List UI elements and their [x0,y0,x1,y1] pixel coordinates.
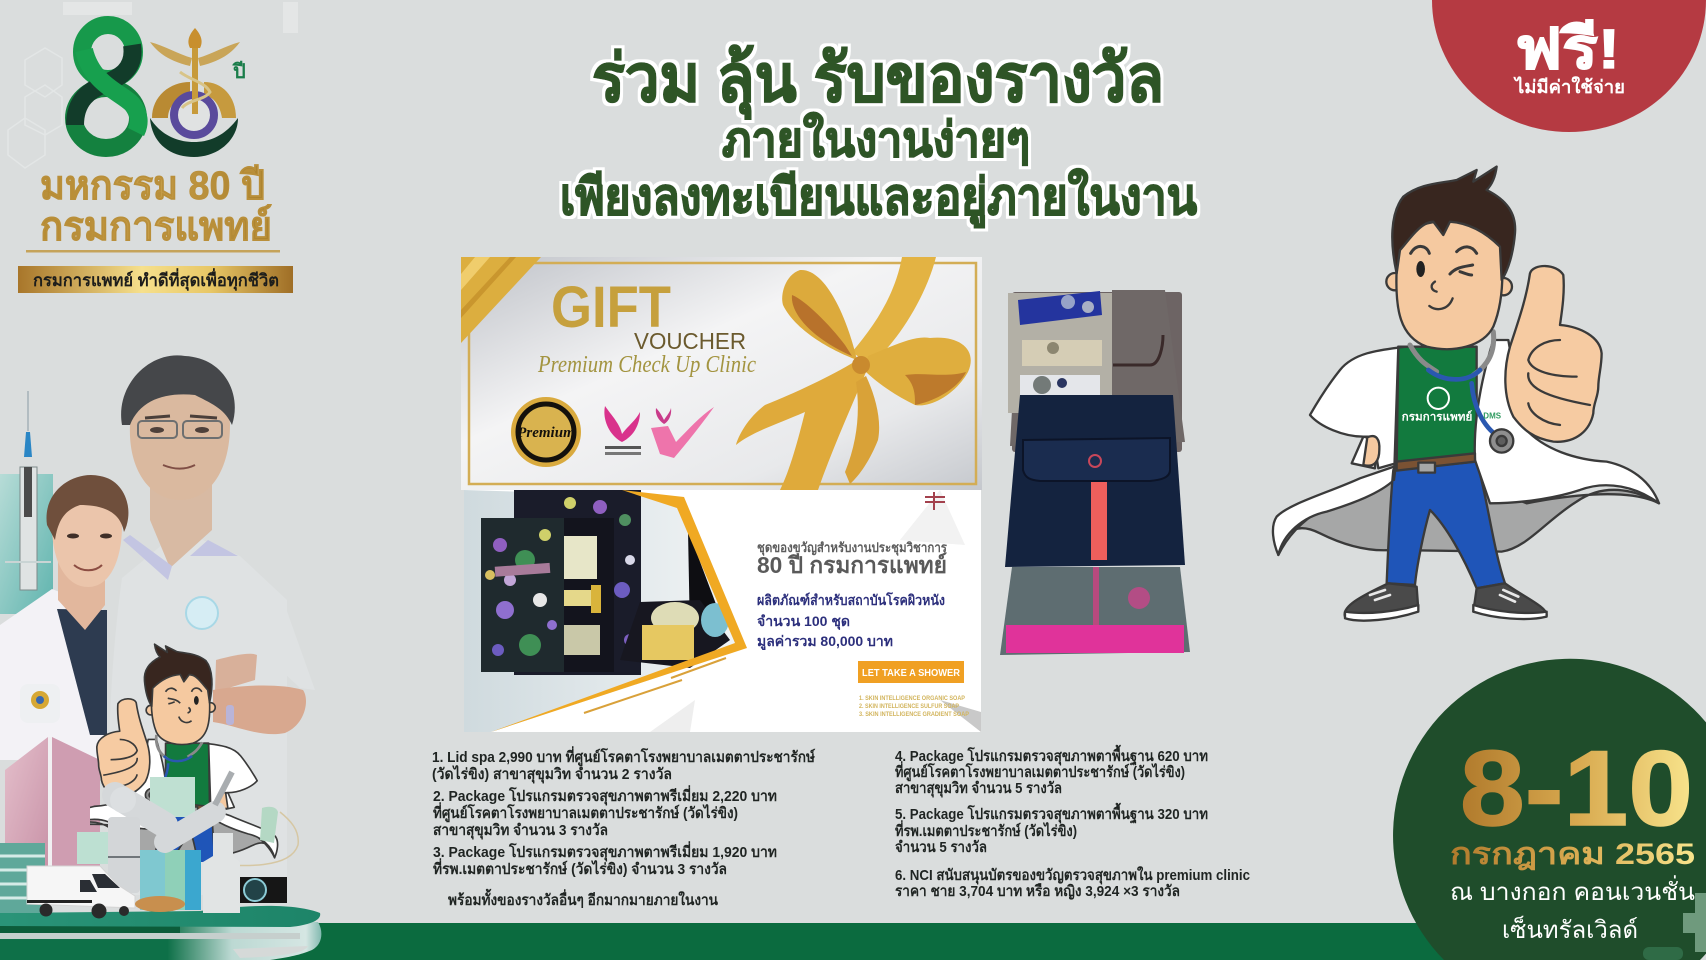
title: ภายในงานง่ายๆ [722,111,1030,167]
panel: tote bags [1000,290,1190,655]
product list: 3. SKIN INTELLIGENCE GRADIENT SOAP [859,712,969,718]
prize list left column: ที่ศูนย์โรคตาโรงพยาบาลเมตตาประชารักษ์ (วัดไร่ขิง) [433,802,738,823]
venue: ณ บางกอก คอนเวนชั่น [1450,875,1695,906]
prize list left column: สาขาสุขุมวิท จำนวน 3 รางวัล [433,821,608,840]
orange button [858,661,964,683]
event name line 1: มหกรรม 80 ปี [40,164,265,208]
bottle [203,833,240,913]
product photo [464,490,747,732]
gift set text: 80 ปี กรมการแพทย์ [757,552,947,578]
shirt dms text: DMS [1483,412,1502,421]
small mascot [90,643,278,862]
panel: date and venue [1393,659,1706,960]
coins [135,896,185,912]
prize list right column [895,744,1250,900]
voucher heading: GIFT [551,275,671,340]
panel: free badge [1432,0,1706,132]
prize list left column: ที่รพ.เมตตาประชารักษ์ (วัดไร่ขิง) จำนวน 3 รางวัล [433,858,727,878]
shirt logo [1428,388,1449,409]
panel: gift voucher: Premium Check Up Clinic [537,352,756,378]
prize list right column: จำนวน 5 รางวัล [895,839,987,856]
product list: 2. SKIN INTELLIGENCE SULFUR SOAP [859,704,959,710]
pink building [5,737,100,867]
logo years label: ปี [232,60,246,83]
free subtext: ไม่มีค่าใช้จ่าย [1513,76,1625,97]
month: กรกฎาคม 2565 [1450,838,1695,871]
mascot: doctor thumbs up [1273,167,1659,621]
prize list left column [432,746,815,909]
prize list left column: 1. Lid spa 2,990 บาท ที่ศูนย์โรคตาโรงพยาบาลเมตตาประชารักษ์ [432,746,815,767]
female doctor [0,475,128,760]
bottom green band [270,923,1500,960]
pink best service check [651,407,714,458]
orange button: LET TAKE A SHOWER [862,668,961,679]
prize list left column: พร้อมทั้งของรางวัลอื่นๆ อีกมากมายภายในงาน [448,888,719,909]
gold banner [18,250,293,293]
panel: skin institute gift set [464,490,981,732]
teal tower [0,474,53,614]
shirt text: กรมการแพทย์ [1402,410,1472,424]
title: เพียงลงทะเบียนและอยู่ภายในงาน [560,168,1197,228]
gold banner: กรมการแพทย์ ทำดีที่สุดเพื่อทุกชีวิต [33,268,279,291]
bubble icon [244,879,266,901]
prize list right column: 5. Package โปรแกรมตรวจสุขภาพตาพื้นฐาน 320 บาท [895,802,1208,824]
pink institute logo [604,406,641,455]
orange frame [491,490,747,732]
free heading: ฟรี! [1515,17,1620,80]
gift set text: ผลิตภัณฑ์สำหรับสถาบันโรคผิวหนัง [757,591,945,608]
medical boxes [0,777,201,913]
prize list left column: 2. Package โปรแกรมตรวจสุขภาพตาพรีเมี่ยม 2,220 บาท [433,785,777,806]
event name line 2: กรมการแพทย์ [40,204,272,249]
gift set text: มูลค่ารวม 80,000 บาท [757,633,893,650]
gift set text: จำนวน 100 ชุด [757,613,850,630]
illustration: doctors and medical scene [0,355,321,960]
male doctor [109,355,315,903]
premium seal: Premium [517,425,575,441]
prize list right column: 4. Package โปรแกรมตรวจสุขภาพตาพื้นฐาน 620 บาท [895,744,1208,766]
premium seal [511,397,581,467]
ministry logo [925,492,945,510]
prize list right column: ที่ศูนย์โรคตาโรงพยาบาลเมตตาประชารักษ์ (วัดไร่ขิง) [895,761,1185,782]
panel: date and venue: เซ็นทรัลเวิลด์ [1502,915,1638,944]
orange accent lines [584,658,726,713]
platform [0,906,321,960]
prize list left column: (วัดไร่ขิง) สาขาสุขุมวิท จำนวน 2 รางวัล [432,764,672,784]
date: 8-10 [1460,728,1693,848]
panel: gift voucher: VOUCHER [634,328,746,354]
syringe [5,391,51,590]
gift set text [757,540,947,650]
prize list right column: 6. NCI สนับสนุนบัตรของขวัญตรวจสุขภาพใน premium clinic [895,866,1250,885]
panel: gift voucher [461,257,982,490]
gold ribbon bow [736,257,971,490]
faint hexagon pattern [8,2,298,168]
product list [859,696,969,718]
gift set text: ชุดของขวัญสำหรับงานประชุมวิชาการ [757,540,947,556]
title: ร่วม ลุ้น รับของรางวัล [592,41,1164,120]
inhaler [260,807,278,843]
prize list left column: 3. Package โปรแกรมตรวจสุขภาพตาพรีเมี่ยม 1,920 บาท [433,841,777,862]
prize list right column: สาขาสุขุมวิท จำนวน 5 รางวัล [895,779,1062,798]
prize list right column: ราคา ชาย 3,704 บาท หรือ หญิง 3,924 ×3 รางวัล [895,882,1180,900]
robot arm [108,772,232,893]
prize list right column: ที่รพ.เมตตาประชารักษ์ (วัดไร่ขิง) [895,820,1077,840]
logo: 80 years [74,25,246,157]
product list: 1. SKIN INTELLIGENCE ORGANIC SOAP [859,696,965,702]
ambulance [27,866,135,918]
orbit line [210,812,298,866]
title [560,41,1197,228]
